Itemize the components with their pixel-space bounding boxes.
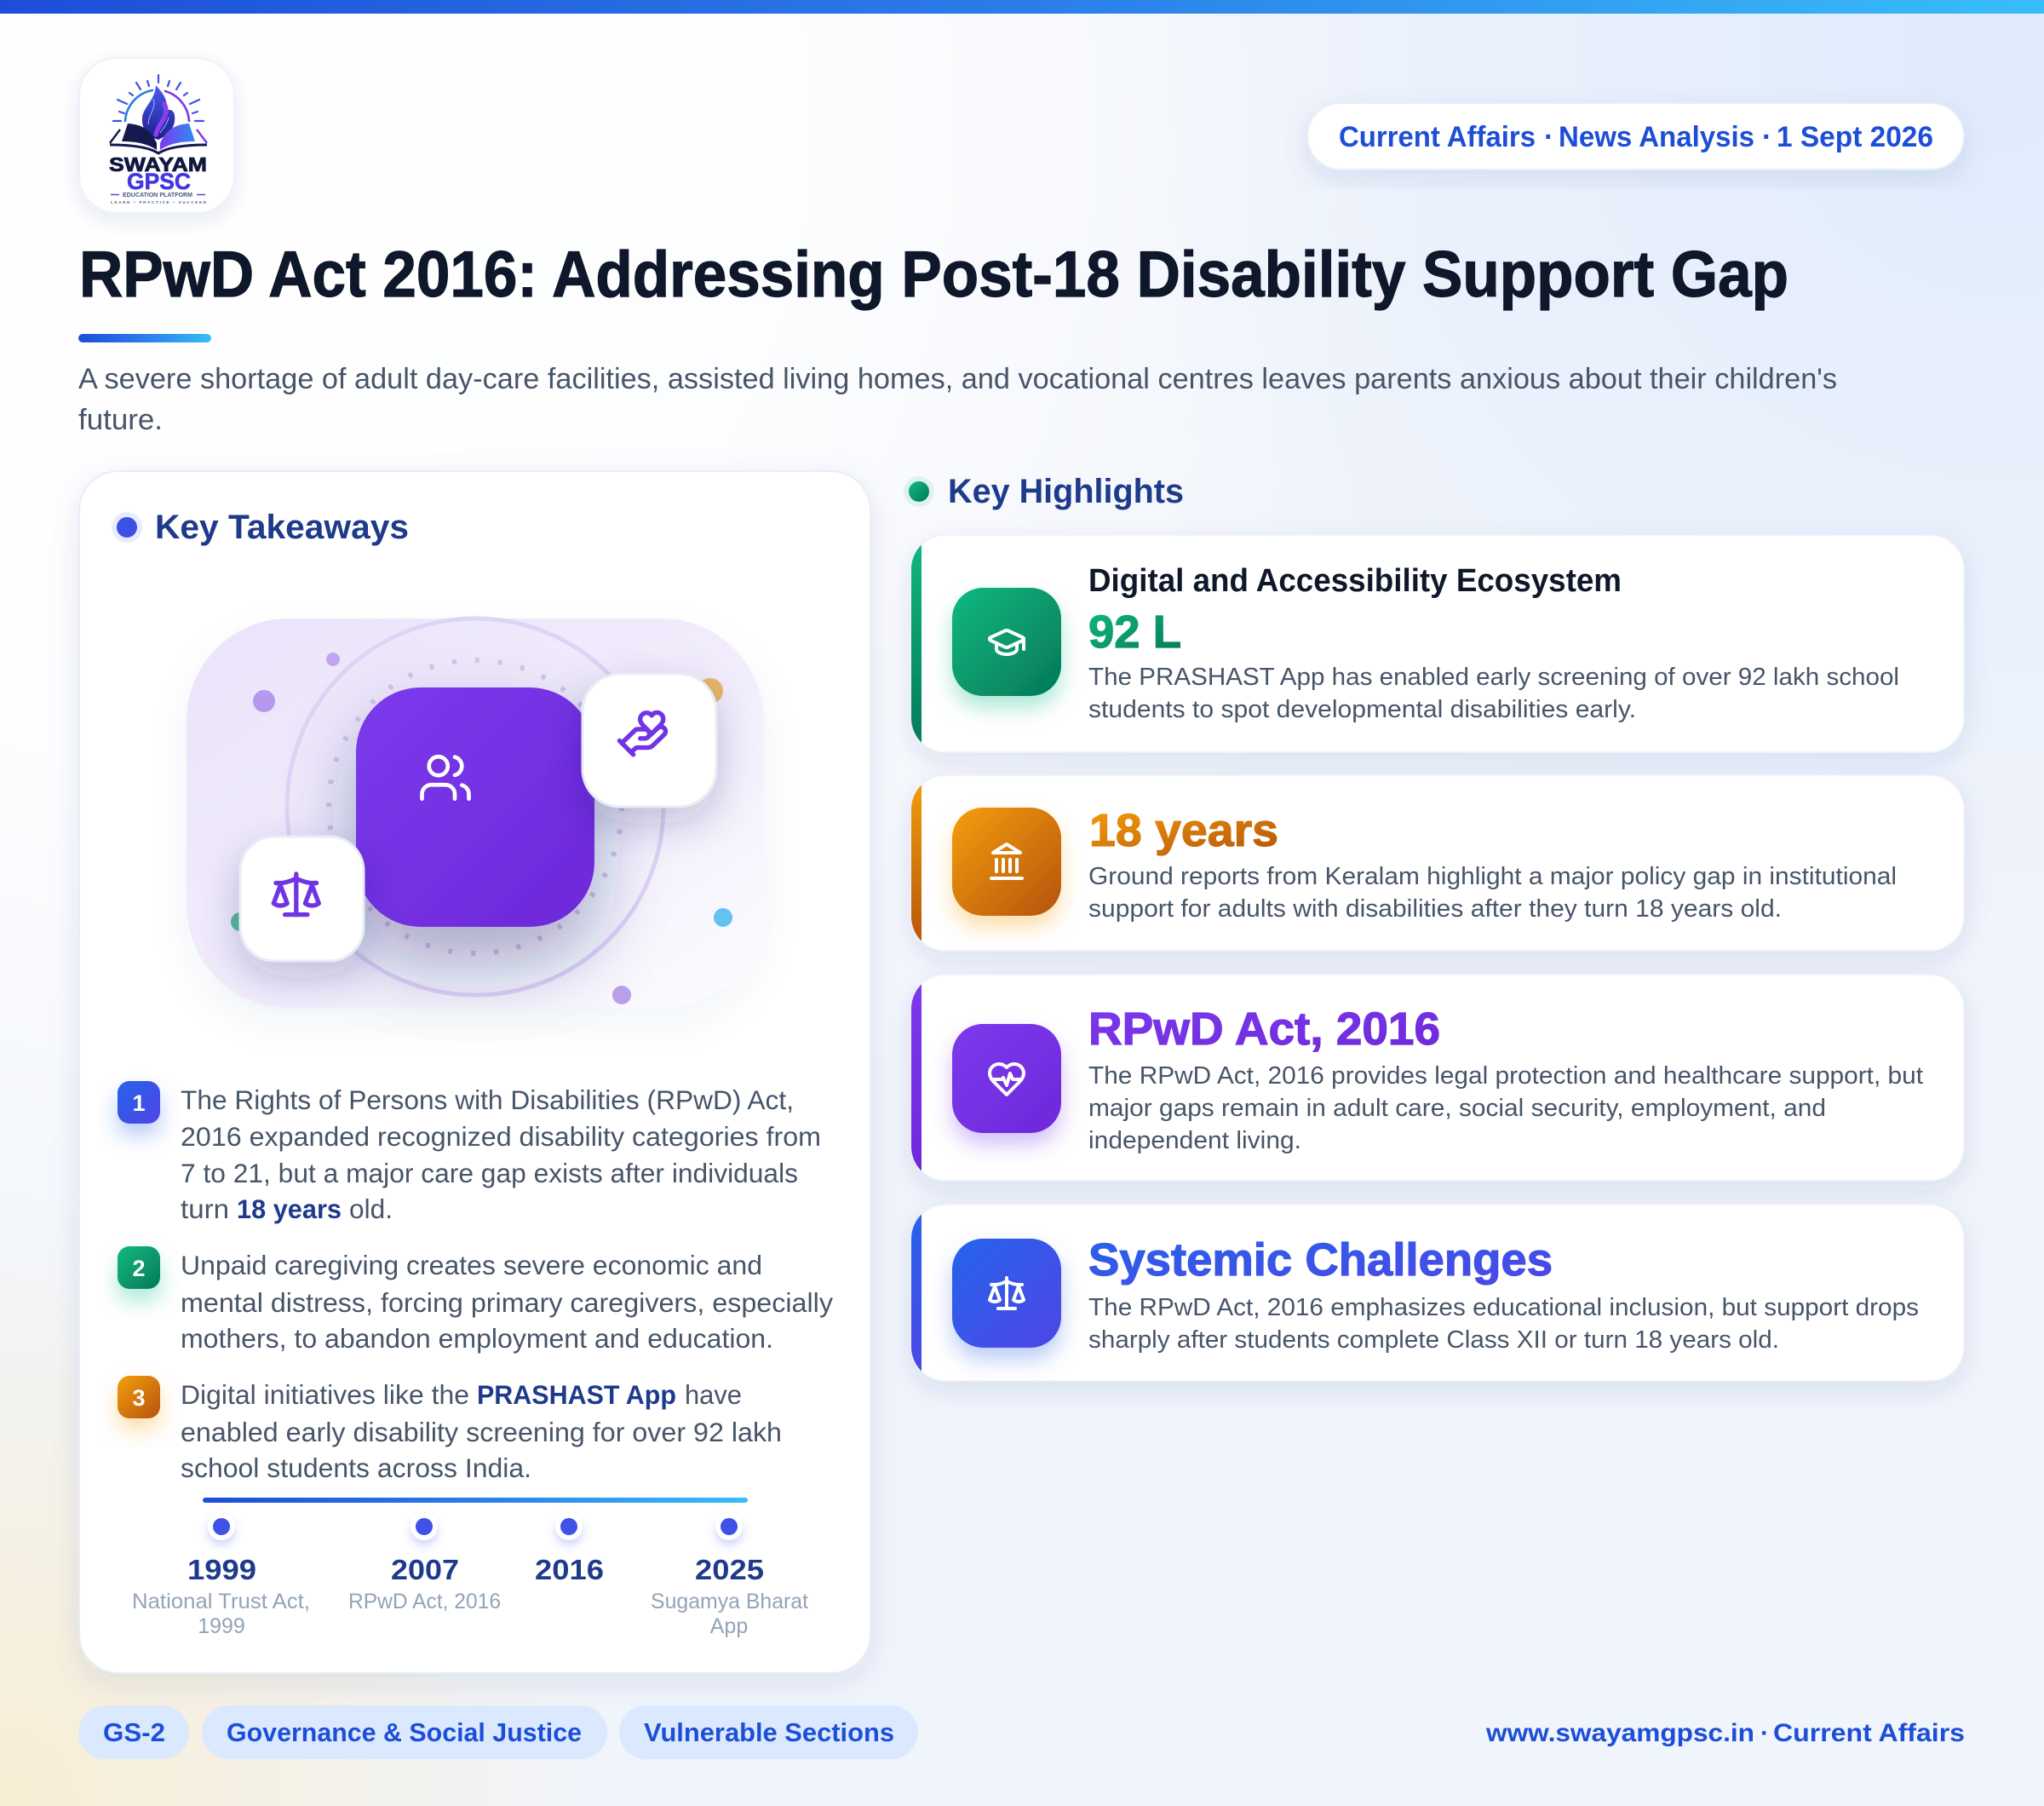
icon: open book <box>110 124 207 153</box>
panel: key takeaways <box>79 471 870 1673</box>
heading: key takeaways: Key Takeaways <box>155 509 409 546</box>
timeline node 2016: 2016 <box>535 1554 604 1585</box>
tag: GS-2 <box>78 1705 189 1759</box>
timeline node 1999: 1999 <box>198 1614 245 1638</box>
floating tile: scales <box>240 837 364 961</box>
footer website <box>1485 1719 1965 1747</box>
card: systemic challenges: sharply after students complete Class XII or turn 18 years old. <box>1088 1326 1779 1354</box>
card: systemic challenges: The RPwD Act, 2016 emphasizes educational inclusion, but support drops <box>1088 1294 1919 1321</box>
icon: institution <box>952 808 1061 916</box>
title underline <box>78 334 211 342</box>
card: digital and accessibility ecosystem <box>911 535 1964 752</box>
takeaway 3 <box>118 1376 782 1483</box>
tag: GS-2: GS-2 <box>103 1717 165 1747</box>
date pill: 1 Sept 2026 <box>1777 121 1933 153</box>
takeaway 3: 3 <box>132 1385 146 1411</box>
takeaway 2 <box>118 1246 833 1354</box>
card: digital and accessibility ecosystem: Digital and Accessibility Ecosystem <box>1088 563 1622 599</box>
takeaway 2: mothers, to abandon employment and education. <box>181 1323 773 1354</box>
takeaway 3: Digital initiatives like the <box>181 1379 469 1410</box>
timeline node 2025: App <box>710 1614 748 1638</box>
central purple tile <box>356 687 594 927</box>
icon: heart pulse <box>952 1024 1061 1133</box>
timeline node 2016 <box>535 1513 604 1585</box>
takeaway 3: enabled early disability screening for over 92 lakh <box>181 1417 782 1447</box>
takeaway 3: have <box>685 1379 742 1410</box>
takeaway 1: The Rights of Persons with Disabilities (RPwD) Act, <box>181 1084 794 1115</box>
takeaway 3: PRASHAST App <box>477 1379 676 1410</box>
timeline node 2007: RPwD Act, 2016 <box>348 1590 501 1613</box>
icon: users <box>422 756 468 799</box>
subtitle: future. <box>78 404 163 436</box>
footer website: · <box>1760 1719 1769 1747</box>
card: digital and accessibility ecosystem: students to spot developmental disabilities early. <box>1088 696 1636 723</box>
subtitle <box>78 363 1837 436</box>
heading: key highlights: Key Highlights <box>948 473 1184 510</box>
timeline node 2025 <box>651 1513 808 1638</box>
tag: vulnerable sections: Vulnerable Sections <box>644 1717 894 1747</box>
card: digital and accessibility ecosystem: The PRASHAST App has enabled early screening of over 92 lakh school <box>1088 664 1899 691</box>
takeaway 1: turn <box>181 1193 229 1224</box>
timeline node 2025: 2025 <box>695 1554 764 1585</box>
timeline <box>132 1498 808 1638</box>
tag: governance and social justice <box>202 1705 607 1759</box>
tag: governance and social justice: Governance & Social Justice <box>227 1717 582 1747</box>
card: rpwd act 2016 <box>911 975 1964 1181</box>
timeline node 1999: National Trust Act, <box>132 1590 310 1613</box>
top accent bar <box>0 0 2044 14</box>
takeaway 2: Unpaid caregiving creates severe economic and <box>181 1250 762 1280</box>
card: systemic challenges <box>911 1205 1964 1381</box>
takeaway 2: 2 <box>132 1256 146 1281</box>
date pill: Current Affairs <box>1339 121 1536 153</box>
card: rpwd act 2016: RPwD Act, 2016 <box>1088 1004 1440 1055</box>
takeaway 1 <box>118 1081 821 1224</box>
icon: graduation cap <box>952 588 1061 696</box>
card: rpwd act 2016: The RPwD Act, 2016 provides legal protection and healthcare support, but <box>1088 1062 1923 1090</box>
timeline node 1999: 1999 <box>187 1554 256 1585</box>
card: 18 years: 18 years <box>1089 805 1278 856</box>
takeaway 3: school students across India. <box>181 1452 531 1483</box>
logo wordmark: EDUCATION PLATFORM <box>123 191 192 198</box>
card: rpwd act 2016: major gaps remain in adult care, social security, employment, and <box>1088 1095 1826 1122</box>
takeaway 2: mental distress, forcing primary caregivers, especially <box>181 1287 833 1318</box>
logo wordmark: GPSC <box>127 169 191 194</box>
date pill <box>1307 103 1964 170</box>
footer website: www.swayamgpsc.in <box>1485 1719 1754 1747</box>
icon: scales <box>952 1239 1061 1348</box>
logo wordmark <box>109 153 207 204</box>
logo: Swayam GPSC <box>79 58 234 213</box>
footer website: Current Affairs <box>1773 1719 1965 1747</box>
subtitle: A severe shortage of adult day-care facilities, assisted living homes, and vocational centres leaves parents anxious about their children's <box>78 363 1837 395</box>
card: 18 years <box>911 775 1964 951</box>
floating tile: hand heart <box>583 674 716 807</box>
card: 18 years: support for adults with disabilities after they turn 18 years old. <box>1088 895 1782 923</box>
icon: flame <box>142 85 175 140</box>
timeline node 2025: Sugamya Bharat <box>651 1590 808 1613</box>
timeline node 2007 <box>348 1513 501 1613</box>
takeaway 1: 2016 expanded recognized disability categories from <box>181 1121 821 1152</box>
tag: vulnerable sections <box>619 1705 918 1759</box>
date pill: · <box>1544 121 1553 153</box>
takeaway 1: 1 <box>132 1090 146 1116</box>
date pill: News Analysis <box>1559 121 1754 153</box>
takeaway 1: 18 years <box>237 1193 342 1224</box>
logo wordmark: SWAYAM <box>109 153 207 175</box>
icon: sun rays and arc <box>113 75 204 121</box>
title: RPwD Act 2016: Addressing Post-18 Disability Support Gap <box>79 239 1788 311</box>
card: systemic challenges: Systemic Challenges <box>1088 1234 1553 1285</box>
takeaway 1: 7 to 21, but a major care gap exists after individuals <box>181 1158 798 1188</box>
takeaway 1: old. <box>349 1193 393 1224</box>
date pill: · <box>1762 121 1771 153</box>
logo wordmark: LEARN • PRACTICE • SUCCEED <box>111 200 207 204</box>
illustration: disability support network <box>187 618 764 1008</box>
timeline node 2007: 2007 <box>391 1554 459 1585</box>
card: rpwd act 2016: independent living. <box>1088 1127 1301 1154</box>
timeline node 1999 <box>132 1513 310 1638</box>
card: 18 years: Ground reports from Keralam highlight a major policy gap in institutional <box>1088 863 1897 890</box>
card: digital and accessibility ecosystem: 92 L <box>1088 607 1181 658</box>
